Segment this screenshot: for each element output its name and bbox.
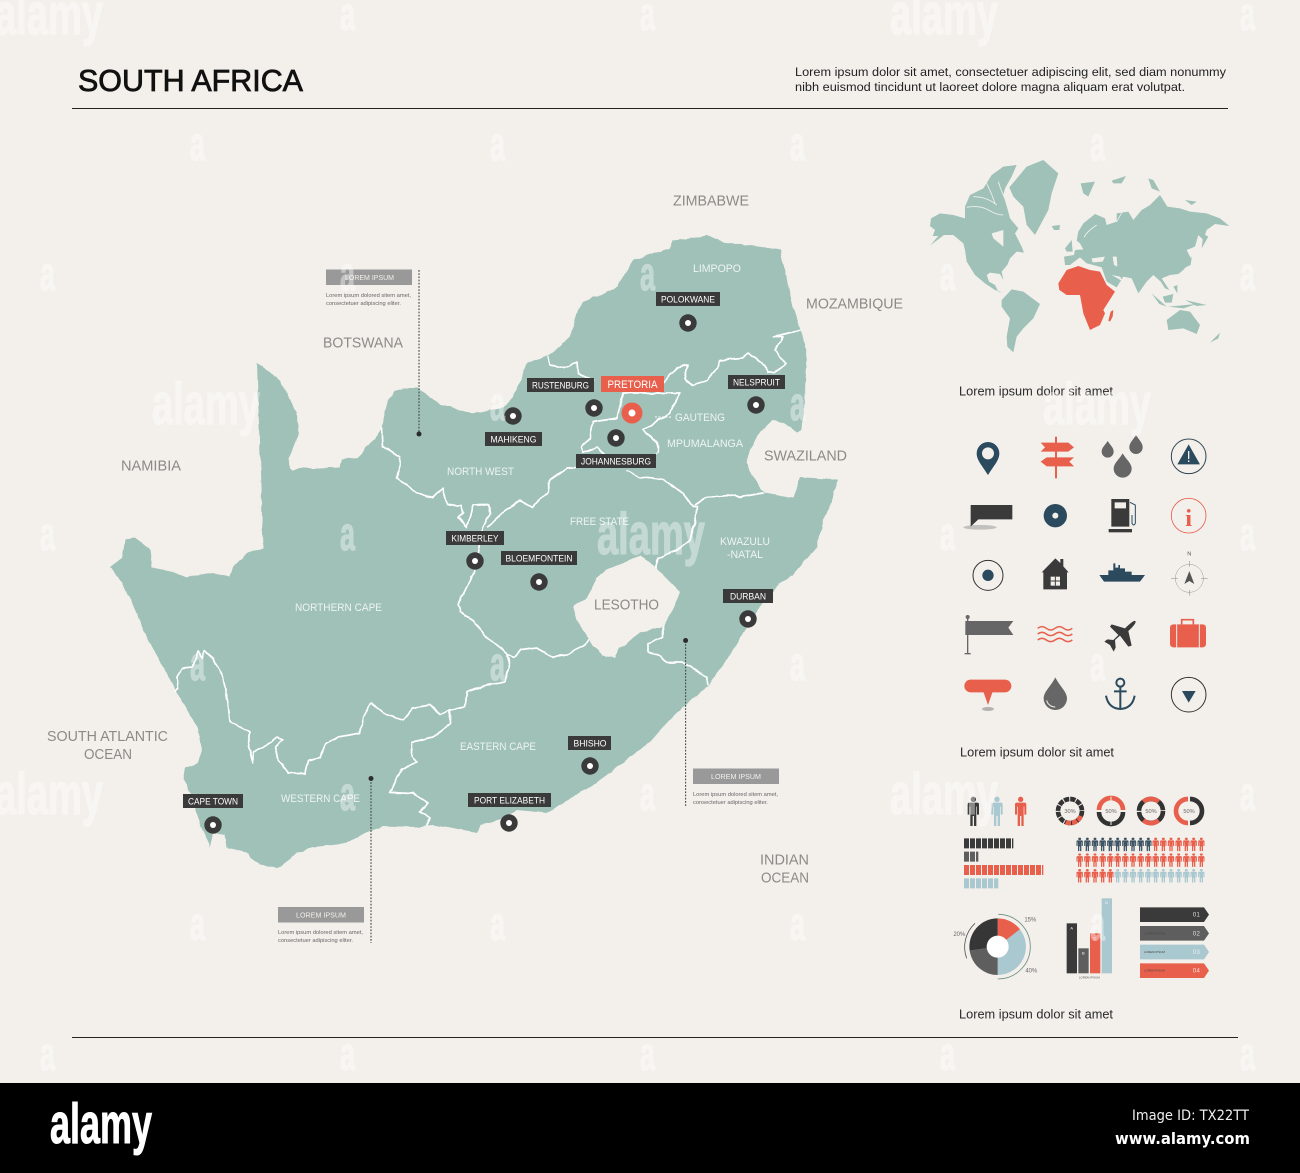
intro text: Lorem ipsum dolor sit amet, consectetuer adipiscing elit, sed diam nonummy	[795, 65, 1227, 79]
watermark overlay: a	[790, 377, 805, 430]
icon: warning	[1171, 439, 1206, 474]
icon: droplet	[1044, 677, 1067, 710]
pie chart	[953, 914, 1038, 979]
Gauteng leader	[655, 416, 672, 418]
province labels: MPUMALANGA	[667, 438, 744, 450]
icon: information	[1171, 498, 1206, 533]
ring: 30 percent: 30%	[1064, 809, 1076, 815]
city: Polokwane: POLOKWANE	[661, 294, 715, 306]
province labels: FREE STATE	[570, 516, 629, 528]
capital: Pretoria: PRETORIA	[608, 379, 658, 391]
ring: 30 percent	[1054, 795, 1086, 827]
province labels: KWAZULU	[720, 536, 770, 548]
watermark overlay: a	[190, 637, 205, 690]
city: Port Elizabeth: PORT ELIZABETH	[474, 796, 545, 806]
neighbouring country and ocean labels: ZIMBABWE	[673, 192, 749, 210]
bar chart: A	[1070, 925, 1073, 930]
icon: house	[1042, 558, 1069, 589]
neighbouring country and ocean labels: LESOTHO	[594, 596, 659, 614]
watermark overlay: a	[1240, 247, 1255, 300]
watermark overlay: a	[490, 377, 505, 430]
callout: south	[278, 776, 374, 944]
neighbouring country and ocean labels	[47, 192, 903, 886]
icon: target	[973, 560, 1003, 590]
city: Kimberley	[446, 531, 504, 570]
neighbouring country and ocean labels: OCEAN	[761, 870, 809, 886]
watermark overlay: a	[340, 247, 355, 300]
watermark overlay: a	[40, 247, 55, 300]
watermark overlay: a	[940, 507, 955, 560]
watermark overlay: alamy	[597, 502, 705, 567]
city: Port Elizabeth	[468, 793, 551, 832]
callout: south: consectetuer adipiscing eliter.	[278, 938, 353, 944]
callout: south: LOREM IPSUM	[296, 910, 346, 919]
watermark overlay: a	[190, 897, 205, 950]
watermark overlay: a	[640, 247, 655, 300]
people and ring charts	[964, 795, 1205, 883]
bar chart: LOREM IPSUM	[1079, 976, 1100, 980]
image id: Image ID: TX22TT	[1132, 1108, 1249, 1124]
watermark overlay: a	[790, 637, 805, 690]
icon: waves	[1038, 627, 1072, 642]
callout: north: consectetuer adipiscing eliter.	[326, 301, 401, 307]
provincial borders	[175, 330, 800, 825]
province labels: NORTH WEST	[447, 466, 514, 478]
ribbon 04: LOREM IPSUM	[1144, 969, 1165, 973]
neighbouring country and ocean labels: INDIAN	[760, 852, 809, 868]
ring: 50 percent half split: 50%	[1105, 809, 1117, 815]
three person figures	[968, 797, 1026, 826]
ribbon 02	[1140, 926, 1209, 941]
capital: Pretoria	[601, 376, 664, 424]
icon: compass: N	[1187, 552, 1191, 558]
icon: fuel pump	[1109, 499, 1135, 532]
watermark overlay: a	[1090, 897, 1105, 950]
watermark overlay: alamy	[1043, 372, 1151, 437]
icon set	[963, 435, 1208, 712]
watermark overlay: a	[490, 897, 505, 950]
title: SOUTH AFRICA	[78, 63, 303, 98]
website: www.alamy.com	[1115, 1129, 1250, 1148]
province labels: LIMPOPO	[693, 263, 741, 275]
neighbouring country and ocean labels: OCEAN	[84, 746, 132, 763]
bar chart: C	[1094, 935, 1097, 940]
icon: water drops	[1102, 435, 1143, 478]
neighbouring country and ocean labels: NAMIBIA	[121, 458, 181, 474]
icon: speech flag	[963, 505, 1012, 530]
ribbon 02: 02	[1193, 930, 1200, 937]
city: Bhisho: BHISHO	[574, 738, 606, 750]
ribbon 01	[1140, 907, 1209, 922]
watermark overlay: alamy	[890, 762, 998, 827]
watermark overlay: a	[490, 637, 505, 690]
intro text	[795, 65, 1227, 94]
ribbon 03: 03	[1193, 949, 1200, 956]
city: Johannesburg: JOHANNESBURG	[581, 456, 651, 468]
ribbon 04: 04	[1193, 968, 1200, 975]
bar chart: D	[1105, 900, 1108, 905]
city: Bhisho	[568, 736, 611, 775]
ring: 50 percent half split	[1099, 797, 1123, 825]
ribbon 01: 01	[1193, 912, 1200, 919]
country landmass	[110, 235, 838, 868]
ribbon 04	[1140, 963, 1209, 978]
watermark overlay: a	[340, 767, 355, 820]
pie chart: 15%	[1024, 918, 1037, 924]
intro text: nibh euismod tincidunt ut laoreet dolore magna aliquam erat volutpat.	[795, 80, 1185, 94]
neighbouring country and ocean labels: SWAZILAND	[764, 448, 847, 464]
map: South Africa	[110, 235, 838, 868]
watermark overlay: alamy	[152, 372, 260, 437]
watermark overlay: a	[1240, 767, 1255, 820]
Madagascar highlight	[1108, 310, 1113, 322]
watermark overlay: a	[1240, 1027, 1255, 1080]
city: Bloemfontein: BLOEMFONTEIN	[506, 554, 573, 564]
neighbouring country and ocean labels: SOUTH ATLANTIC	[47, 728, 168, 745]
province labels: NORTHERN CAPE	[295, 602, 382, 614]
city: Rustenburg	[527, 378, 603, 417]
person grid	[1076, 838, 1205, 882]
icon: information: i	[1185, 505, 1192, 532]
footer band	[0, 1083, 1300, 1173]
city: Polokwane	[656, 292, 720, 332]
watermark overlay: a	[640, 767, 655, 820]
Lesotho	[573, 556, 680, 658]
watermark overlay: a	[1240, 507, 1255, 560]
watermark overlay: a	[940, 247, 955, 300]
watermark overlay: a	[40, 507, 55, 560]
province labels	[281, 263, 770, 805]
city: Nelspruit: NELSPRUIT	[733, 378, 780, 388]
province labels: -NATAL	[727, 549, 763, 561]
icon: down arrow	[1171, 677, 1206, 712]
watermark overlay: a	[40, 1027, 55, 1080]
watermark overlay: a	[640, 1027, 655, 1080]
icon: compass	[1171, 552, 1208, 596]
caption: map: Lorem ipsum dolor sit amet	[959, 384, 1114, 398]
bar chart: B	[1082, 950, 1085, 955]
callout: east	[683, 638, 779, 806]
city: Cape Town: CAPE TOWN	[188, 796, 238, 808]
ring: 50 percent left right: 50%	[1183, 809, 1195, 815]
callout: east: LOREM IPSUM	[711, 772, 761, 781]
ribbon 03	[1140, 945, 1209, 959]
callout: east: consectetuer adipiscing eliter.	[693, 800, 768, 806]
watermark overlay: a	[790, 117, 805, 170]
icon: airplane	[1104, 621, 1136, 652]
pie chart: 40%	[1025, 968, 1038, 974]
watermark overlay: a	[490, 117, 505, 170]
icon: anchor	[1106, 679, 1135, 709]
pie chart: 20%	[953, 932, 966, 938]
icon: flag	[965, 615, 1013, 654]
city: Rustenburg: RUSTENBURG	[532, 380, 589, 392]
world map locator	[930, 160, 1229, 352]
callout: north: LOREM IPSUM	[345, 273, 394, 282]
alamy logo: alamy	[50, 1092, 152, 1156]
province labels: GAUTENG	[675, 412, 725, 424]
city: Nelspruit	[728, 375, 785, 414]
sea and bay cut-outs	[967, 182, 1128, 282]
city: Johannesburg	[576, 429, 656, 468]
watermark overlay: a	[340, 507, 355, 560]
caption: charts: Lorem ipsum dolor sit amet	[959, 1008, 1114, 1022]
icon: disc	[1044, 504, 1067, 527]
city: Kimberley: KIMBERLEY	[452, 534, 499, 544]
icon: signpost	[1041, 437, 1074, 478]
watermark overlay: a	[340, 1027, 355, 1080]
ribbon 03: LOREM IPSUM	[1144, 950, 1165, 954]
neighbouring country and ocean labels: MOZAMBIQUE	[806, 296, 903, 312]
watermark overlay: a	[1090, 637, 1105, 690]
caption: icons: Lorem ipsum dolor sit amet	[960, 746, 1115, 760]
watermark overlay: a	[940, 1027, 955, 1080]
ring: 50 percent segmented: 50%	[1145, 809, 1157, 815]
ring: 50 percent segmented	[1139, 799, 1163, 823]
city: Durban	[723, 589, 773, 628]
watermark overlay: a	[190, 117, 205, 170]
segmented bars	[964, 843, 1043, 883]
city: Durban: DURBAN	[730, 592, 766, 602]
province labels: EASTERN CAPE	[460, 741, 536, 753]
icon: coral marker	[964, 680, 1011, 711]
callout: east: Lorem ipsum dolored sitem amet,	[693, 792, 778, 798]
Africa highlight	[1058, 266, 1115, 330]
province labels: WESTERN CAPE	[281, 793, 360, 805]
callout: south: Lorem ipsum dolored sitem amet,	[278, 930, 363, 936]
icon: suitcase	[1170, 620, 1206, 647]
continents	[930, 160, 1229, 352]
callout: north: Lorem ipsum dolored sitem amet,	[326, 293, 411, 299]
neighbouring country and ocean labels: BOTSWANA	[323, 334, 403, 352]
pie, bar and ribbon charts	[953, 898, 1209, 980]
ring: 50 percent left right	[1176, 799, 1202, 823]
city: Bloemfontein	[501, 551, 577, 591]
bar chart	[1067, 898, 1112, 980]
icon: ship	[1099, 563, 1145, 582]
city: Mahikeng: MAHIKENG	[490, 434, 536, 446]
city: Cape Town	[183, 794, 243, 834]
city: Mahikeng	[485, 407, 542, 446]
callout: north	[326, 270, 422, 436]
watermark overlay: a	[1090, 117, 1105, 170]
icon: location pin	[977, 442, 999, 475]
watermark overlay: a	[790, 897, 805, 950]
ribbon 02: LOREM IPSUM	[1144, 931, 1165, 935]
